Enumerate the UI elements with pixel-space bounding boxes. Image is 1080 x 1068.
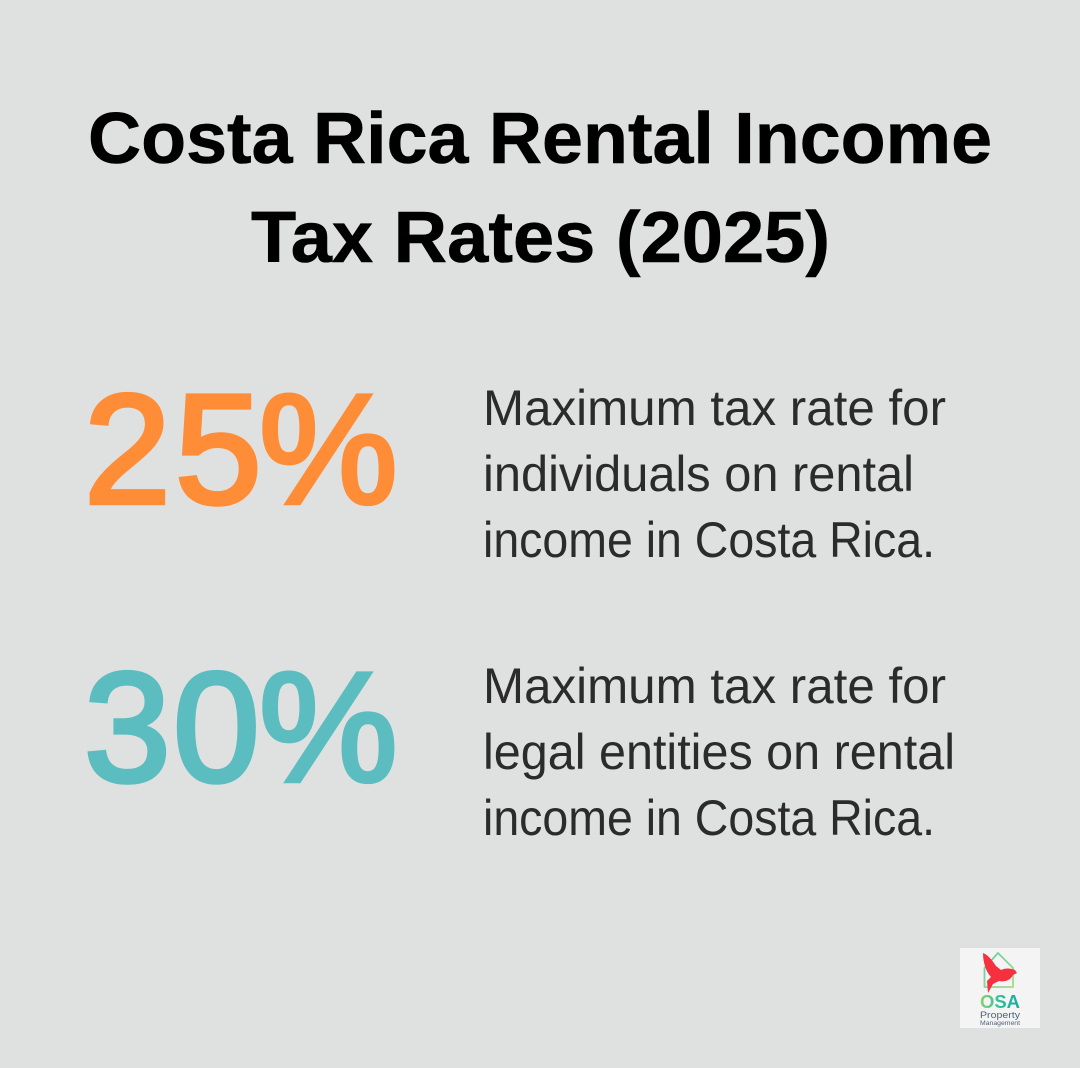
- stat value 25%: 25%: [84, 363, 398, 537]
- icon: red bird: [983, 953, 1017, 993]
- logo: OSA Property Management: [960, 948, 1040, 1028]
- title: [88, 99, 992, 278]
- description: legal entities: [483, 658, 955, 846]
- stat: 25% individuals: [84, 363, 946, 568]
- logo: OSA Property Management: Property: [980, 1010, 1021, 1020]
- description: individuals: individuals on rental: [483, 446, 914, 502]
- stat: 30% legal entities: [84, 641, 955, 846]
- description: individuals: [483, 380, 946, 568]
- description: legal entities: Maximum tax rate for: [483, 658, 946, 714]
- logo wordmark: OSA: [980, 992, 1020, 1012]
- title: Tax Rates (2025): [251, 198, 830, 278]
- stat value 30%: 30%: [84, 641, 398, 815]
- logo: OSA Property Management: Management: [980, 1021, 1020, 1027]
- description: individuals: income in Costa Rica.: [483, 512, 935, 568]
- title: Costa Rica Rental Income: [88, 99, 992, 179]
- description: legal entities: legal entities on rental: [483, 724, 955, 780]
- description: individuals: Maximum tax rate for: [483, 380, 946, 436]
- icon: house outline: [984, 953, 1013, 987]
- description: legal entities: income in Costa Rica.: [483, 790, 935, 846]
